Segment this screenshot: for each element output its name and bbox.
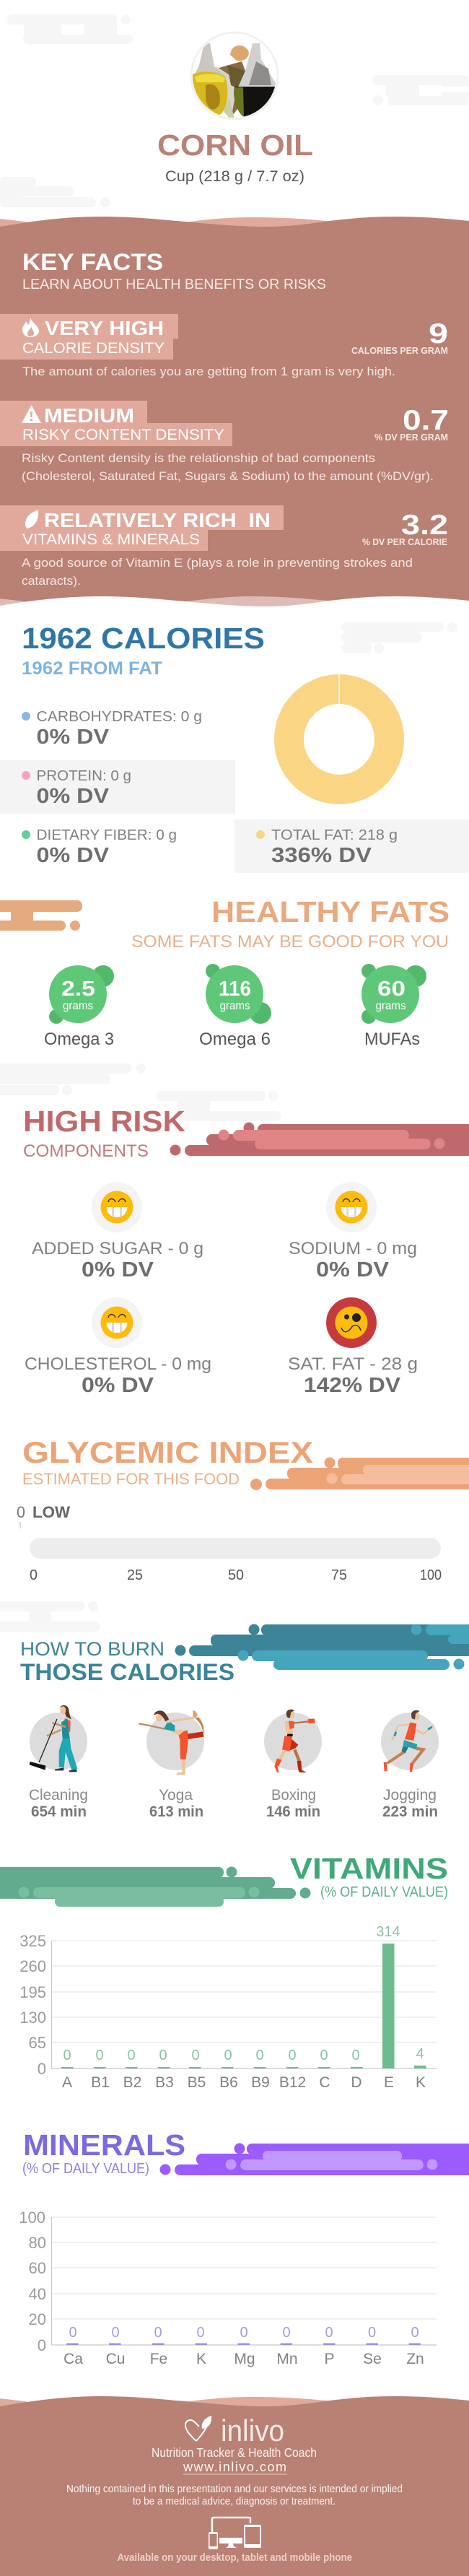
bar chart: minerals: Mn: [276, 2351, 298, 2367]
legend: carbohydrates: [22, 709, 202, 749]
subheading: SOME FATS MAY BE GOOD FOR YOU: [131, 932, 449, 952]
item: saturated fat: 142% DV: [304, 1374, 401, 1397]
bar chart: minerals: P: [324, 2351, 335, 2367]
panel: minerals: [19, 2128, 469, 2367]
item: saturated fat: [288, 1297, 418, 1397]
heading line two: THOSE CALORIES: [20, 1659, 234, 1685]
fact: vitamins and minerals: % DV PER CALORIE: [362, 537, 447, 547]
icon: person boxing: [274, 1710, 315, 1772]
icon: person sweeping: [30, 1705, 77, 1772]
scale labels: 50: [228, 1567, 244, 1583]
bar chart: vitamins: A: [62, 2074, 72, 2091]
marker value: 0: [17, 1503, 25, 1521]
bar chart: vitamins: 0: [191, 2048, 200, 2063]
legend: dietary fiber: DIETARY FIBER: 0 g: [36, 827, 177, 843]
item: sodium: SODIUM - 0 mg: [289, 1239, 417, 1258]
scale labels: 25: [127, 1567, 143, 1583]
activity: yoga: Yoga: [159, 1787, 193, 1803]
bar chart: vitamins: B9: [251, 2074, 270, 2091]
bar chart: vitamins: B5: [188, 2074, 206, 2091]
bar chart: vitamins: 314: [376, 1924, 400, 1940]
fact: calorie density: CALORIE DENSITY: [22, 340, 165, 357]
bar chart: vitamins: 65: [29, 2034, 46, 2052]
legend: total fat: TOTAL FAT: 218 g: [271, 827, 398, 843]
panel: glycemic index: [17, 1435, 469, 1583]
panel: calories: [0, 622, 469, 873]
icon: devices: [209, 2518, 261, 2549]
icon: inlivo heart logo: [185, 2416, 211, 2441]
bar chart: vitamins: B1: [91, 2074, 110, 2091]
badge: mufas: MUFAs: [364, 1030, 420, 1049]
badge: mufas: 60: [377, 978, 406, 1001]
fact: vitamins and minerals: A good source of Vitamin E (plays a role in preventing strokes and: [22, 556, 413, 570]
bar chart: vitamins: [19, 1924, 437, 2091]
bar chart: minerals: 0: [325, 2325, 333, 2341]
item: cholesterol: [25, 1297, 211, 1397]
activity: jogging: 223 min: [382, 1803, 438, 1820]
icon: person jogging: [384, 1710, 434, 1772]
badge: omega 3: Omega 3: [44, 1030, 114, 1049]
icon: warning triangle: [22, 405, 41, 423]
badge: omega 6: Omega 6: [199, 1030, 271, 1049]
badge: omega 6: 116: [219, 978, 251, 1001]
heading: 1962 CALORIES: [22, 622, 265, 655]
bar chart: vitamins: 0: [320, 2048, 328, 2063]
icon: happy face: [335, 1191, 368, 1223]
decorative cloud top left: [7, 14, 133, 44]
item: sodium: 0% DV: [316, 1258, 390, 1282]
badge: omega 6: [199, 964, 271, 1049]
scale labels: [30, 1567, 442, 1583]
serving size: Cup (218 g / 7.7 oz): [165, 168, 304, 185]
subheading: ESTIMATED FOR THIS FOOD: [22, 1470, 240, 1488]
disclaimer: to be a medical advice, diagnosis or treatment.: [133, 2496, 336, 2507]
subheading: (% OF DAILY VALUE): [22, 2161, 149, 2177]
legend: protein: [0, 760, 235, 814]
title: CORN OIL: [157, 129, 313, 162]
panel: how to burn calories: [0, 1601, 469, 1820]
fact: calorie density: 9: [429, 318, 448, 349]
icon: flame: [22, 318, 39, 337]
bar chart: vitamins: B6: [219, 2074, 238, 2091]
activity: yoga: [139, 1710, 204, 1820]
panel: key facts: [0, 217, 469, 614]
bar chart: minerals: Fe: [150, 2351, 167, 2367]
website: www.inlivo.com: [183, 2460, 286, 2474]
activity: jogging: [381, 1710, 439, 1820]
heading: GLYCEMIC INDEX: [22, 1435, 313, 1469]
bar chart: vitamins: 0: [351, 2048, 360, 2063]
bar chart: vitamins: 4: [416, 2046, 424, 2062]
decorative shape: [0, 900, 82, 931]
decorative shape: [170, 1122, 469, 1156]
legend: protein: PROTEIN: 0 g: [36, 768, 131, 784]
bar chart: minerals: Mg: [234, 2351, 255, 2367]
bar chart: minerals: 0: [411, 2325, 419, 2341]
badge: omega 3: 2.5: [61, 978, 95, 1001]
wave: [0, 2396, 469, 2576]
bar chart: vitamins: 130: [19, 2009, 46, 2027]
bar chart: minerals: 60: [29, 2259, 46, 2277]
bar chart: vitamins: D: [351, 2074, 362, 2091]
badge: omega 6: grams: [219, 1000, 250, 1012]
badge: mufas: grams: [375, 1000, 406, 1012]
fact: risky content density: % DV PER GRAM: [374, 432, 448, 443]
badge: omega 3: [44, 965, 114, 1049]
legend: carbohydrates: 0% DV: [36, 726, 110, 749]
scale labels: 100: [420, 1567, 442, 1583]
decorative shape: [250, 1457, 469, 1490]
activity: cleaning: [29, 1705, 88, 1820]
bar chart: vitamins: 0: [63, 2048, 71, 2063]
heading: HIGH RISK: [23, 1105, 185, 1138]
bar chart: minerals: Cu: [106, 2351, 125, 2367]
bar chart: vitamins: 260: [19, 1957, 46, 1975]
bar chart: vitamins: E: [384, 2074, 394, 2091]
bar chart: vitamins: 0: [255, 2048, 264, 2063]
wave bottom: [0, 596, 469, 614]
availability note: Available on your desktop, tablet and mobile phone: [117, 2551, 352, 2564]
subheading: 1962 FROM FAT: [22, 658, 162, 679]
subheading: LEARN ABOUT HEALTH BENEFITS OR RISKS: [22, 277, 326, 292]
subheading: (% OF DAILY VALUE): [320, 1884, 448, 1900]
activity: boxing: 146 min: [266, 1803, 320, 1820]
activity: boxing: [264, 1710, 322, 1820]
item: saturated fat: SAT. FAT - 28 g: [288, 1354, 418, 1374]
badge: mufas: [361, 964, 426, 1049]
bar chart: minerals: 80: [29, 2234, 46, 2252]
bar chart: vitamins: 325: [19, 1932, 46, 1950]
scale labels: 0: [30, 1567, 38, 1583]
fact: risky content density: [0, 401, 449, 483]
item: added sugar: [32, 1182, 203, 1282]
decorative shape: [175, 1624, 469, 1670]
disclaimer: [66, 2484, 403, 2507]
bar chart: vitamins: B12: [279, 2074, 306, 2091]
marker line: [20, 1522, 21, 1528]
legend: dietary fiber: 0% DV: [36, 844, 110, 867]
icon: happy face: [101, 1307, 133, 1339]
item: sodium: [289, 1182, 417, 1282]
disclaimer: Nothing contained in this presentation and our services is intended or implied: [66, 2484, 403, 2495]
bar chart: vitamins: B2: [123, 2074, 141, 2091]
fact: vitamins and minerals: [0, 505, 448, 588]
panel: high risk: [0, 1063, 469, 1397]
bar chart: minerals: 0: [38, 2336, 46, 2354]
icon: leaf: [25, 510, 38, 528]
icon: happy face: [101, 1191, 133, 1223]
panel: footer: [0, 2396, 469, 2576]
bar chart: vitamins: 0: [224, 2048, 232, 2063]
bar chart: vitamins: B3: [155, 2074, 174, 2091]
badge: omega 3: grams: [63, 1000, 93, 1012]
header panel: [0, 14, 469, 207]
decorative cloud: [341, 622, 457, 653]
legend: total fat: [234, 819, 469, 873]
bar chart: vitamins: C: [319, 2074, 330, 2091]
donut chart: [289, 674, 390, 790]
icon: sad face: [335, 1307, 368, 1339]
fact: vitamins and minerals: RELATIVELY RICH IN: [44, 509, 271, 531]
fact: risky content density: 0.7: [403, 405, 449, 436]
activity: yoga: 613 min: [149, 1803, 203, 1820]
fact: vitamins and minerals: VITAMINS & MINERALS: [22, 531, 200, 548]
bar chart: minerals: 0: [196, 2325, 205, 2341]
bar chart: vitamins: K: [416, 2074, 426, 2091]
bar chart: minerals: 0: [368, 2325, 376, 2341]
decorative clouds: [0, 1063, 281, 1121]
fact: risky content density: RISKY CONTENT DENSITY: [22, 427, 224, 443]
legend: total fat: 336% DV: [271, 844, 372, 867]
bar chart: minerals: [19, 2209, 437, 2367]
bar chart: minerals: 0: [282, 2325, 291, 2341]
fact: risky content density: MEDIUM: [44, 404, 134, 427]
icon: person in yoga pose: [139, 1710, 203, 1775]
decorative cloud right: [372, 75, 469, 105]
heading: MINERALS: [23, 2128, 185, 2162]
legend: dietary fiber: [22, 827, 177, 867]
bar chart: minerals: 0: [111, 2325, 120, 2341]
bar chart: minerals: 0: [240, 2325, 248, 2341]
bar chart: minerals: 40: [29, 2285, 46, 2303]
bar chart: minerals: Ca: [63, 2351, 83, 2367]
icon: bottles of oil: [191, 32, 278, 119]
subheading: COMPONENTS: [23, 1141, 149, 1161]
decorative shape: [160, 2143, 469, 2175]
scale bar: [30, 1538, 441, 1559]
panel: vitamins: [0, 1852, 448, 2091]
heading line one: HOW TO BURN: [20, 1638, 165, 1660]
activity: cleaning: Cleaning: [29, 1787, 88, 1803]
bar chart: minerals: 20: [29, 2310, 46, 2328]
legend: protein: 0% DV: [36, 785, 110, 808]
bar chart: minerals: Zn: [406, 2351, 424, 2367]
item: cholesterol: CHOLESTEROL - 0 mg: [25, 1354, 211, 1374]
bar chart: vitamins: 0: [127, 2048, 136, 2063]
fact: calorie density: The amount of calories you are getting from 1 gram is very high.: [22, 365, 395, 378]
bar chart: vitamins: 0: [288, 2048, 297, 2063]
bar chart: vitamins: 0: [159, 2048, 167, 2063]
bar chart: vitamins: 0: [38, 2060, 46, 2078]
activity: boxing: Boxing: [271, 1787, 316, 1803]
bar chart: minerals: Se: [363, 2351, 382, 2367]
activity: cleaning: 654 min: [31, 1803, 87, 1820]
decorative cloud left: [0, 177, 110, 207]
bar chart: vitamins: 195: [19, 1983, 46, 2001]
heading: VITAMINS: [290, 1852, 448, 1885]
marker label: LOW: [32, 1503, 70, 1521]
scale labels: 75: [331, 1567, 347, 1583]
fact: calorie density: CALORIES PER GRAM: [351, 346, 448, 356]
item: cholesterol: 0% DV: [82, 1374, 154, 1397]
fact: calorie density: VERY HIGH: [45, 317, 164, 339]
logo wordmark: inlivo: [221, 2414, 284, 2447]
bar chart: vitamins: 0: [95, 2048, 104, 2063]
heading: HEALTHY FATS: [211, 895, 450, 928]
heading: KEY FACTS: [22, 249, 163, 275]
legend: carbohydrates: CARBOHYDRATES: 0 g: [36, 709, 202, 725]
bar chart: minerals: K: [196, 2351, 206, 2367]
decorative cloud: [0, 1601, 100, 1632]
activity: jogging: Jogging: [383, 1787, 437, 1803]
item: added sugar: 0% DV: [82, 1258, 154, 1282]
bar chart: minerals: 100: [19, 2209, 45, 2227]
fact: vitamins and minerals: 3.2: [401, 510, 448, 541]
decorative shape: [0, 1867, 310, 1907]
fact: risky content density: (Cholesterol, Saturated Fat, Sugars & Sodium) to the amount (%DV/gr).: [22, 469, 434, 483]
wave top: [0, 217, 469, 610]
fact: risky content density: Risky Content density is the relationship of bad components: [22, 451, 375, 465]
tagline: Nutrition Tracker & Health Coach: [152, 2445, 317, 2460]
bar chart: minerals: 0: [154, 2325, 162, 2341]
panel: healthy fats: [0, 895, 450, 1049]
item: added sugar: ADDED SUGAR - 0 g: [32, 1239, 203, 1258]
fact: calorie density: [0, 314, 448, 378]
fact: vitamins and minerals: cataracts).: [22, 574, 81, 588]
bar chart: minerals: 0: [69, 2325, 77, 2341]
